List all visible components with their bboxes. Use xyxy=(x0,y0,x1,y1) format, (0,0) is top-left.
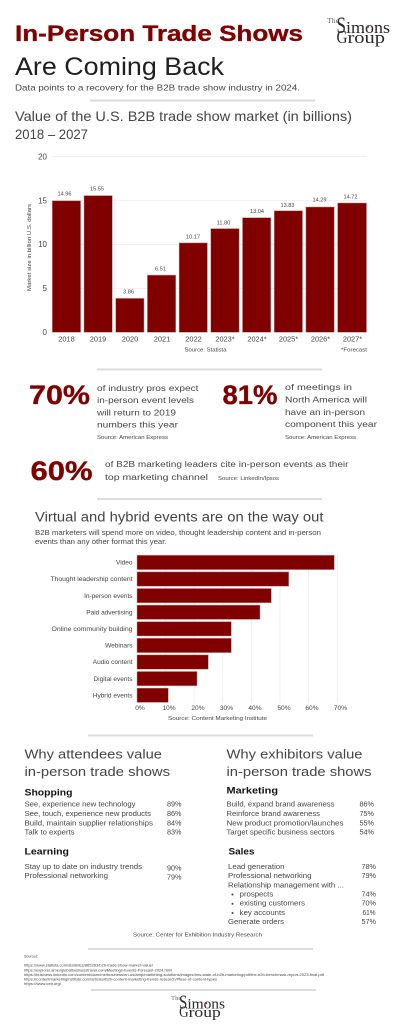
sales list: Relationship management with ... xyxy=(228,882,344,889)
x axis labels: 2019 xyxy=(90,335,106,344)
sources list: https://www.ceir.org/ xyxy=(24,982,61,986)
percentage axis labels: 0% xyxy=(135,705,145,712)
category labels: Video xyxy=(116,560,133,567)
logo: The Simons Group (header): roup xyxy=(348,28,385,47)
y axis labels: 5 xyxy=(43,284,48,293)
source: CEIR: Source: Center for Exhibition Industry Research xyxy=(133,932,262,938)
category labels: Digital events xyxy=(93,676,133,683)
sources list xyxy=(24,954,324,986)
logo: The Simons Group (header): G xyxy=(336,27,348,47)
sales list: Generate orders xyxy=(228,919,285,926)
stat: 70% xyxy=(29,380,199,441)
bar value labels: 6.51 xyxy=(155,266,166,272)
logo: The Simons Group (header): The xyxy=(327,16,340,25)
category labels: In-person events xyxy=(84,593,133,600)
learning list: 79% xyxy=(167,875,182,882)
marketing list xyxy=(226,785,374,836)
sales list: 74% xyxy=(362,892,376,898)
shopping list: 89% xyxy=(167,802,182,809)
section intro text: events than any other format this year. xyxy=(35,537,166,546)
sources list: https://contentmarketinginstitute.com/articles/b2b-content-marketing-trends-research/#fuse-of-content-types xyxy=(24,978,217,982)
section intro text: B2B marketers will spend more on video, thought leadership content and in-person xyxy=(35,528,321,537)
title: In-Person Trade Shows xyxy=(15,21,303,46)
y axis title: Market size in billion U.S. dollars xyxy=(27,204,33,291)
shopping list: Shopping xyxy=(24,788,73,799)
logo: The Simons Group (header): S xyxy=(336,13,346,38)
sales list: 78% xyxy=(362,864,376,871)
sources list: Sources: xyxy=(24,954,38,958)
stat: 60%: of B2B marketing leaders cite in-person events as their xyxy=(105,459,349,469)
percentage axis labels: 60% xyxy=(305,705,319,712)
bar value labels: 14.72 xyxy=(344,194,358,200)
heading xyxy=(24,746,170,779)
category labels: Thought leadership content xyxy=(50,576,133,583)
learning list: 90% xyxy=(167,866,182,873)
stat: 81%: North America will xyxy=(285,394,367,404)
sales list: prospects xyxy=(240,892,274,898)
stat: 60%: Source: LinkedIn/Ipsos xyxy=(218,476,279,482)
sales list: existing customers xyxy=(240,901,306,908)
bar value labels: 14.29 xyxy=(312,198,326,204)
x axis labels: 2025* xyxy=(279,335,298,344)
percentage axis labels: 50% xyxy=(277,705,291,712)
title block xyxy=(15,21,303,92)
marketing list: Target specific business sectors xyxy=(226,829,335,836)
category labels xyxy=(50,560,133,699)
logo: The Simons Group (header) xyxy=(327,13,390,47)
subtitle heading: Are Coming Back xyxy=(15,53,225,81)
learning list: Learning xyxy=(24,846,69,857)
shopping list: Talk to experts xyxy=(24,829,75,836)
shopping list: See, touch, experience new products xyxy=(24,811,152,818)
panel: why attendees value trade shows xyxy=(24,746,182,882)
learning list xyxy=(24,846,182,882)
category labels: Paid advertising xyxy=(86,609,133,616)
marketing list: Marketing xyxy=(226,785,278,796)
heading: virtual and hybrid events: Virtual and hybrid events are on the way out xyxy=(35,510,324,525)
intro text: Data points to a recovery for the B2B trade show industry in 2024. xyxy=(15,82,300,92)
percentage axis labels: 20% xyxy=(191,705,205,712)
logo: The Simons Group (header): imons xyxy=(346,18,390,37)
y axis labels xyxy=(38,152,48,337)
sources list: https://explorer.amexglobalbusinesstravel.com/Meetings-Events-Forecast-2024.html xyxy=(24,968,172,972)
bar value labels: 13.83 xyxy=(280,203,294,209)
stat: 81% xyxy=(222,380,377,441)
logo: The Simons Group (footer): roup xyxy=(189,1005,221,1021)
shopping list: 86% xyxy=(167,811,182,818)
bar value labels: 15.55 xyxy=(90,187,104,193)
heading: market value chart: 2018 – 2027 xyxy=(15,127,88,142)
stat: 60%: top marketing channel xyxy=(105,472,208,482)
x axis labels xyxy=(58,335,362,344)
bars xyxy=(137,555,334,702)
sources list: https://business.linkedin.com/content/dam/me/business/en-us/amp/marketing-solutions/images/lms-state-of-b2b-marketing/pdf/the-b2b-benchmark-report-2023-final.pdf xyxy=(24,973,324,977)
learning list: Professional networking xyxy=(24,873,108,880)
stat: 60%: 60% xyxy=(30,456,92,486)
y axis labels: 10 xyxy=(38,240,48,249)
logo: The Simons Group (footer): imons xyxy=(187,996,225,1012)
x axis labels: 2023* xyxy=(215,335,235,344)
bar value labels: 13.04 xyxy=(250,209,264,215)
y axis labels: 0 xyxy=(43,328,48,337)
stat: 70%: in-person event levels xyxy=(97,395,194,405)
panel: why exhibitors value trade shows xyxy=(226,746,376,926)
stat: 70%: Source: American Express xyxy=(97,435,168,441)
stat: 70%: will return to 2019 xyxy=(96,408,176,418)
sales list: key accounts xyxy=(240,910,286,917)
percentage axis labels: 40% xyxy=(248,705,262,712)
stat: 70%: 70% xyxy=(29,380,90,410)
stat: 81%: 81% xyxy=(222,380,278,410)
marketing list: 54% xyxy=(360,829,374,836)
marketing list: Build, expand brand awareness xyxy=(226,802,335,809)
sales list: Lead generation xyxy=(228,864,285,871)
forecast note: *Forecast xyxy=(341,348,367,354)
stat: 81%: have an in-person xyxy=(285,407,365,417)
x axis labels: 2020 xyxy=(122,335,138,344)
marketing list: 86% xyxy=(360,802,374,809)
chart source: Source: Content Marketing Institute xyxy=(168,716,267,722)
sales list: Sales xyxy=(228,846,254,857)
stat: 81%: component this year xyxy=(285,419,377,429)
bar chart: market value by year xyxy=(27,152,367,354)
sources list: https://www.statista.com/statistics/865283/b2b-trade-show-market-value/ xyxy=(24,964,153,968)
sales list: 61% xyxy=(362,910,376,917)
sales list: 70% xyxy=(362,901,376,908)
shopping list xyxy=(24,788,182,836)
logo: The Simons Group (footer): S xyxy=(179,991,187,1013)
learning list: Stay up to date on industry trends xyxy=(24,864,143,871)
sales list: 79% xyxy=(362,873,376,880)
percentage axis labels xyxy=(135,705,347,712)
heading: in-person trade shows xyxy=(226,764,372,779)
category labels: Webinars xyxy=(105,643,133,650)
stat: 81%: of meetings in xyxy=(285,382,352,392)
marketing list: 55% xyxy=(360,820,374,827)
x axis labels: 2026* xyxy=(311,335,330,344)
x axis labels: 2021 xyxy=(154,335,170,344)
heading xyxy=(226,746,372,779)
logo: The Simons Group (footer): G xyxy=(179,1004,189,1021)
bar value labels: 10.17 xyxy=(186,234,200,240)
x axis labels: 2018 xyxy=(58,335,75,344)
horizontal bar chart: content formats xyxy=(50,555,347,722)
logo: The Simons Group (footer) xyxy=(171,991,225,1021)
percentage axis labels: 30% xyxy=(220,705,233,712)
chart source: Source: Statista xyxy=(184,348,227,354)
x axis labels: 2027* xyxy=(343,335,362,344)
stat: 70%: of industry pros expect xyxy=(97,383,199,393)
heading: Why exhibitors value xyxy=(226,746,362,762)
heading: market value chart: Value of the U.S. B2B trade show market (in billions) xyxy=(15,109,352,124)
sales list xyxy=(228,846,376,926)
stat: 60% xyxy=(30,456,349,486)
stat: 81%: Source: American Express xyxy=(285,435,356,441)
bar value labels: 3.86 xyxy=(123,290,134,296)
heading: market value chart xyxy=(15,109,352,142)
shopping list: Build, maintain supplier relationships xyxy=(24,820,154,827)
category labels: Online community building xyxy=(52,626,133,633)
percentage axis labels: 70% xyxy=(334,705,347,712)
bar value labels xyxy=(58,187,358,296)
stat: 70%: numbers this year xyxy=(97,420,178,430)
shopping list: 84% xyxy=(167,820,182,827)
shopping list: See, experience new technology xyxy=(24,802,136,809)
marketing list: 75% xyxy=(360,811,374,818)
percentage axis labels: 10% xyxy=(162,705,176,712)
sales list: Professional networking xyxy=(228,873,312,880)
section intro text xyxy=(35,528,321,546)
y axis labels: 20 xyxy=(38,152,48,161)
marketing list: Reinforce brand awareness xyxy=(226,811,321,818)
x axis labels: 2024* xyxy=(247,335,267,344)
shopping list: 83% xyxy=(167,829,182,836)
heading: Why attendees value xyxy=(24,746,162,762)
logo: The Simons Group (footer): The xyxy=(171,995,181,1002)
bar value labels: 11.80 xyxy=(217,220,230,226)
marketing list: New product promotion/launches xyxy=(226,820,344,827)
bars xyxy=(52,196,367,332)
y axis labels: 15 xyxy=(38,196,48,205)
heading: in-person trade shows xyxy=(24,764,170,779)
category labels: Hybrid events xyxy=(93,692,133,699)
category labels: Audio content xyxy=(93,659,133,666)
bar value labels: 14.96 xyxy=(58,192,72,198)
x axis labels: 2022 xyxy=(185,335,202,344)
sales list: 57% xyxy=(362,919,376,926)
